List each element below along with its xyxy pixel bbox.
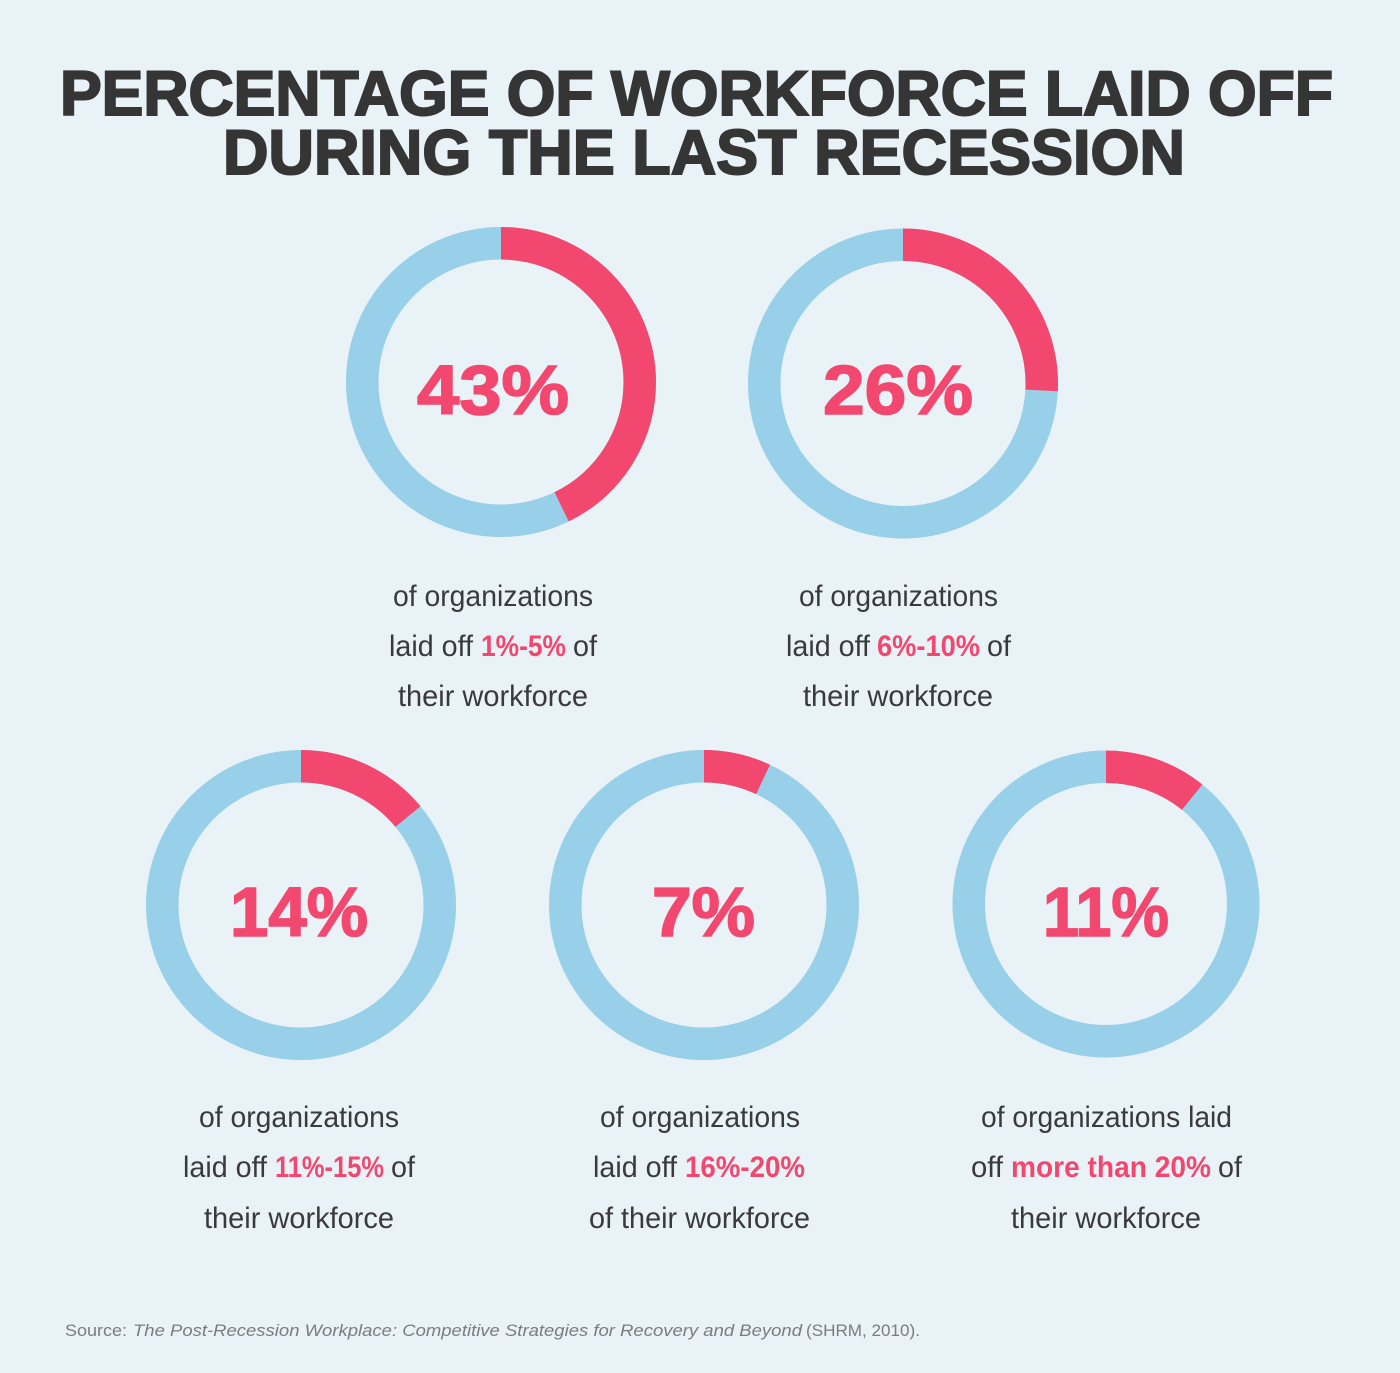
description: 16%-20%: laid off bbox=[593, 1151, 678, 1184]
description: 6%-10%: of bbox=[987, 630, 1012, 663]
description: 1%-5%: of organizations bbox=[393, 580, 593, 613]
description: 11%-15% bbox=[183, 1101, 416, 1235]
description: 16%-20% bbox=[589, 1101, 810, 1235]
description: 11%-15%: of organizations bbox=[199, 1101, 399, 1134]
description: 6%-10%: 6%-10% bbox=[877, 630, 980, 663]
value: 43%: 43% bbox=[417, 351, 569, 429]
value: 26%: 26% bbox=[823, 351, 973, 429]
description: 11%-15%: laid off bbox=[183, 1151, 268, 1184]
description: 16%-20%: of their workforce bbox=[589, 1202, 810, 1235]
value: 11%: 11% bbox=[1043, 873, 1169, 951]
value: 7%: 7% bbox=[652, 873, 755, 951]
title: PERCENTAGE OF WORKFORCE LAID OFF bbox=[60, 59, 1333, 129]
description: 11%-15%: 11%-15% bbox=[275, 1151, 384, 1184]
panel: 7% laid off 16%-20% bbox=[565, 766, 843, 1235]
description: more than 20% bbox=[971, 1101, 1243, 1235]
panel: 26% laid off 6%-10% bbox=[764, 245, 1042, 713]
description: 16%-20%: of organizations bbox=[600, 1101, 800, 1134]
description: more than 20%: of bbox=[1218, 1151, 1243, 1184]
donut chart: 7% bbox=[565, 766, 843, 1044]
panel: 11% laid off more than 20% bbox=[969, 767, 1243, 1235]
donut chart: 43% bbox=[362, 243, 640, 521]
donut chart: 14% bbox=[162, 766, 440, 1044]
description: 1%-5%: their workforce bbox=[398, 680, 588, 713]
value: 14%: 14% bbox=[230, 873, 368, 951]
description: 1%-5% bbox=[389, 580, 598, 713]
source note: (SHRM, 2010). bbox=[806, 1321, 920, 1340]
description: 6%-10%: their workforce bbox=[803, 680, 993, 713]
title: DURING THE LAST RECESSION bbox=[223, 118, 1185, 188]
source note: Source: bbox=[65, 1321, 127, 1340]
description: 6%-10% bbox=[786, 580, 1012, 713]
description: 11%-15%: their workforce bbox=[204, 1202, 394, 1235]
source note: The Post-Recession Workplace: Competitive Strategies for Recovery and Beyond bbox=[133, 1321, 803, 1340]
description: more than 20%: of organizations laid bbox=[981, 1101, 1232, 1134]
description: 1%-5%: 1%-5% bbox=[481, 630, 566, 663]
description: 6%-10%: of organizations bbox=[799, 580, 998, 613]
description: 1%-5%: laid off bbox=[389, 630, 474, 663]
description: 1%-5%: of bbox=[573, 630, 598, 663]
donut chart: 26% bbox=[764, 245, 1042, 522]
description: 11%-15%: of bbox=[391, 1151, 416, 1184]
panel: 43% laid off 1%-5% bbox=[362, 243, 640, 713]
donut chart: 11% bbox=[969, 767, 1243, 1041]
description: more than 20%: off bbox=[971, 1151, 1004, 1184]
description: 16%-20%: 16%-20% bbox=[685, 1151, 805, 1184]
title bbox=[60, 59, 1333, 188]
description: more than 20%: their workforce bbox=[1011, 1202, 1201, 1235]
description: more than 20%: more than 20% bbox=[1011, 1151, 1211, 1184]
panel: 14% laid off 11%-15% bbox=[162, 766, 440, 1235]
description: 6%-10%: laid off bbox=[786, 630, 871, 663]
